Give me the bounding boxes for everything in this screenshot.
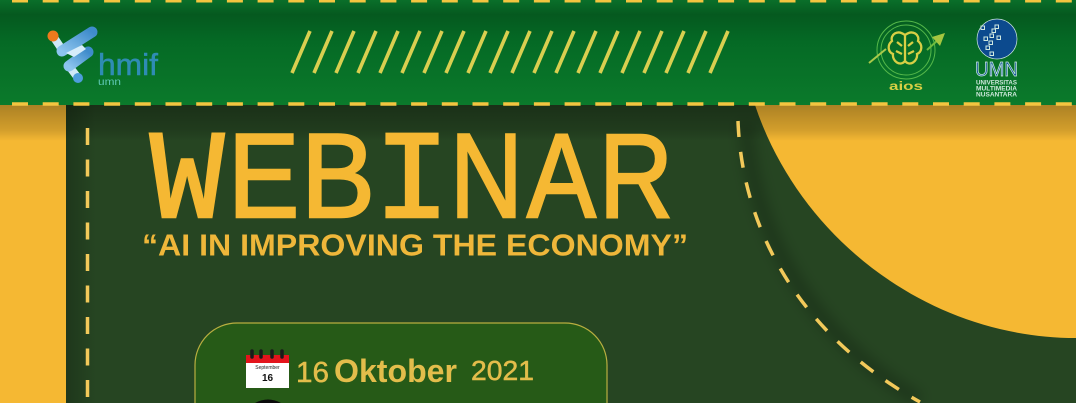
panel: left yellow strip [0, 105, 66, 403]
subtitle: “AI IN IMPROVING THE ECONOMY” [142, 228, 688, 262]
logo wordmark: hmif [98, 47, 158, 82]
UMN sub label: MULTIMEDIA [976, 86, 1018, 92]
UMN sub label: UNIVERSITAS [976, 80, 1017, 86]
date text [296, 353, 534, 389]
title: R [599, 108, 673, 243]
curved dashed stitching [738, 121, 920, 402]
date text: 2021 [471, 355, 534, 386]
icon: hmif logo [48, 30, 158, 88]
title: N [450, 110, 523, 243]
title: A [527, 109, 596, 243]
panel: event details [195, 323, 607, 403]
decorative slashes [292, 31, 728, 73]
AIOS label: aios [889, 79, 923, 93]
icon: calendar: September [255, 365, 280, 371]
UMN label: UMN [975, 59, 1018, 81]
title: B [301, 109, 375, 243]
icon: UMN logo [975, 19, 1018, 98]
UMN sub label [976, 80, 1018, 98]
UMN sub label: NUSANTARA [976, 92, 1018, 98]
logo sub text: umn [98, 77, 121, 88]
title [150, 108, 673, 255]
header shadow [0, 105, 1076, 141]
title: I [374, 112, 450, 255]
icon: AIOS logo [869, 21, 945, 93]
icon: clock top [255, 400, 281, 403]
icon: calendar [246, 351, 289, 388]
top dashed stitching [12, 0, 1076, 2]
brain icon [889, 33, 921, 63]
header band [0, 0, 1076, 105]
icon: calendar: 16 [262, 373, 273, 384]
left dashed stitching [86, 128, 89, 403]
date text: 16 [296, 357, 329, 389]
date text: Oktober [334, 353, 457, 389]
title: W [150, 113, 224, 255]
strip edge shadow [66, 105, 96, 403]
bottom dashed stitching [12, 102, 1076, 106]
panel: yellow corner curve [755, 105, 1076, 338]
title: E [228, 109, 299, 243]
curve shadow [746, 125, 919, 400]
